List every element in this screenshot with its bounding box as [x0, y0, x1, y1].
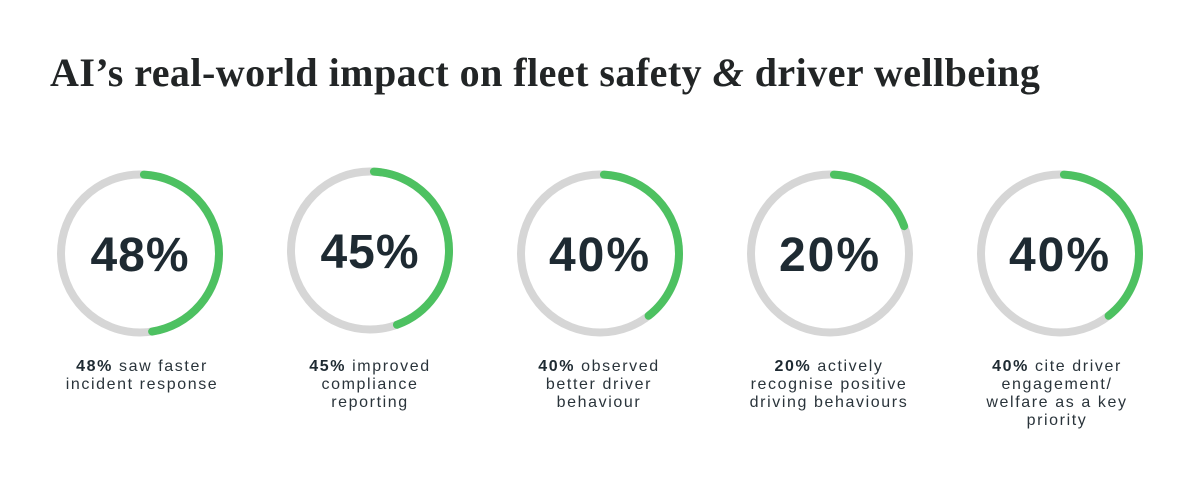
title: AI’s real-world impact on fleet safety & driver wellbeing — [50, 50, 1040, 95]
donut: 45%: 45% — [320, 226, 420, 279]
caption: 48%: 48% saw faster — [76, 358, 208, 375]
caption: 40% welfare: welfare as a key — [986, 394, 1128, 411]
donut: 40% welfare — [981, 174, 1139, 332]
caption: 40% behaviour — [538, 358, 660, 411]
caption: 45%: reporting — [331, 394, 409, 411]
caption: 40% welfare: engagement/ — [1001, 376, 1112, 393]
donut: 20%: 20% — [779, 229, 881, 282]
caption: 48%: incident response — [66, 376, 218, 393]
caption: 20%: recognise positive — [751, 376, 907, 393]
caption: 40% welfare: 40% cite driver — [992, 358, 1122, 375]
caption: 40% behaviour: behaviour — [557, 394, 641, 411]
caption: 40% welfare: priority — [1027, 412, 1087, 429]
caption: 20%: 20% actively — [774, 358, 884, 375]
caption: 40% behaviour: better driver — [546, 376, 652, 393]
donut: 48% — [61, 174, 219, 332]
caption: 45% — [309, 358, 431, 411]
donut: 45% — [291, 172, 449, 330]
donut: 40% welfare: 40% — [1009, 229, 1111, 282]
caption: 48% — [66, 358, 218, 393]
caption: 45%: compliance — [322, 376, 418, 393]
caption: 20%: driving behaviours — [750, 394, 908, 411]
donut: 40% behaviour: 40% — [549, 229, 651, 282]
caption: 40% welfare — [986, 358, 1128, 429]
caption: 40% behaviour: 40% observed — [538, 358, 660, 375]
caption: 20% — [750, 358, 908, 411]
donut: 40% behaviour — [521, 174, 679, 332]
donut: 20% — [751, 174, 909, 332]
donut: 48%: 48% — [90, 229, 190, 282]
caption: 45%: 45% improved — [309, 358, 431, 375]
